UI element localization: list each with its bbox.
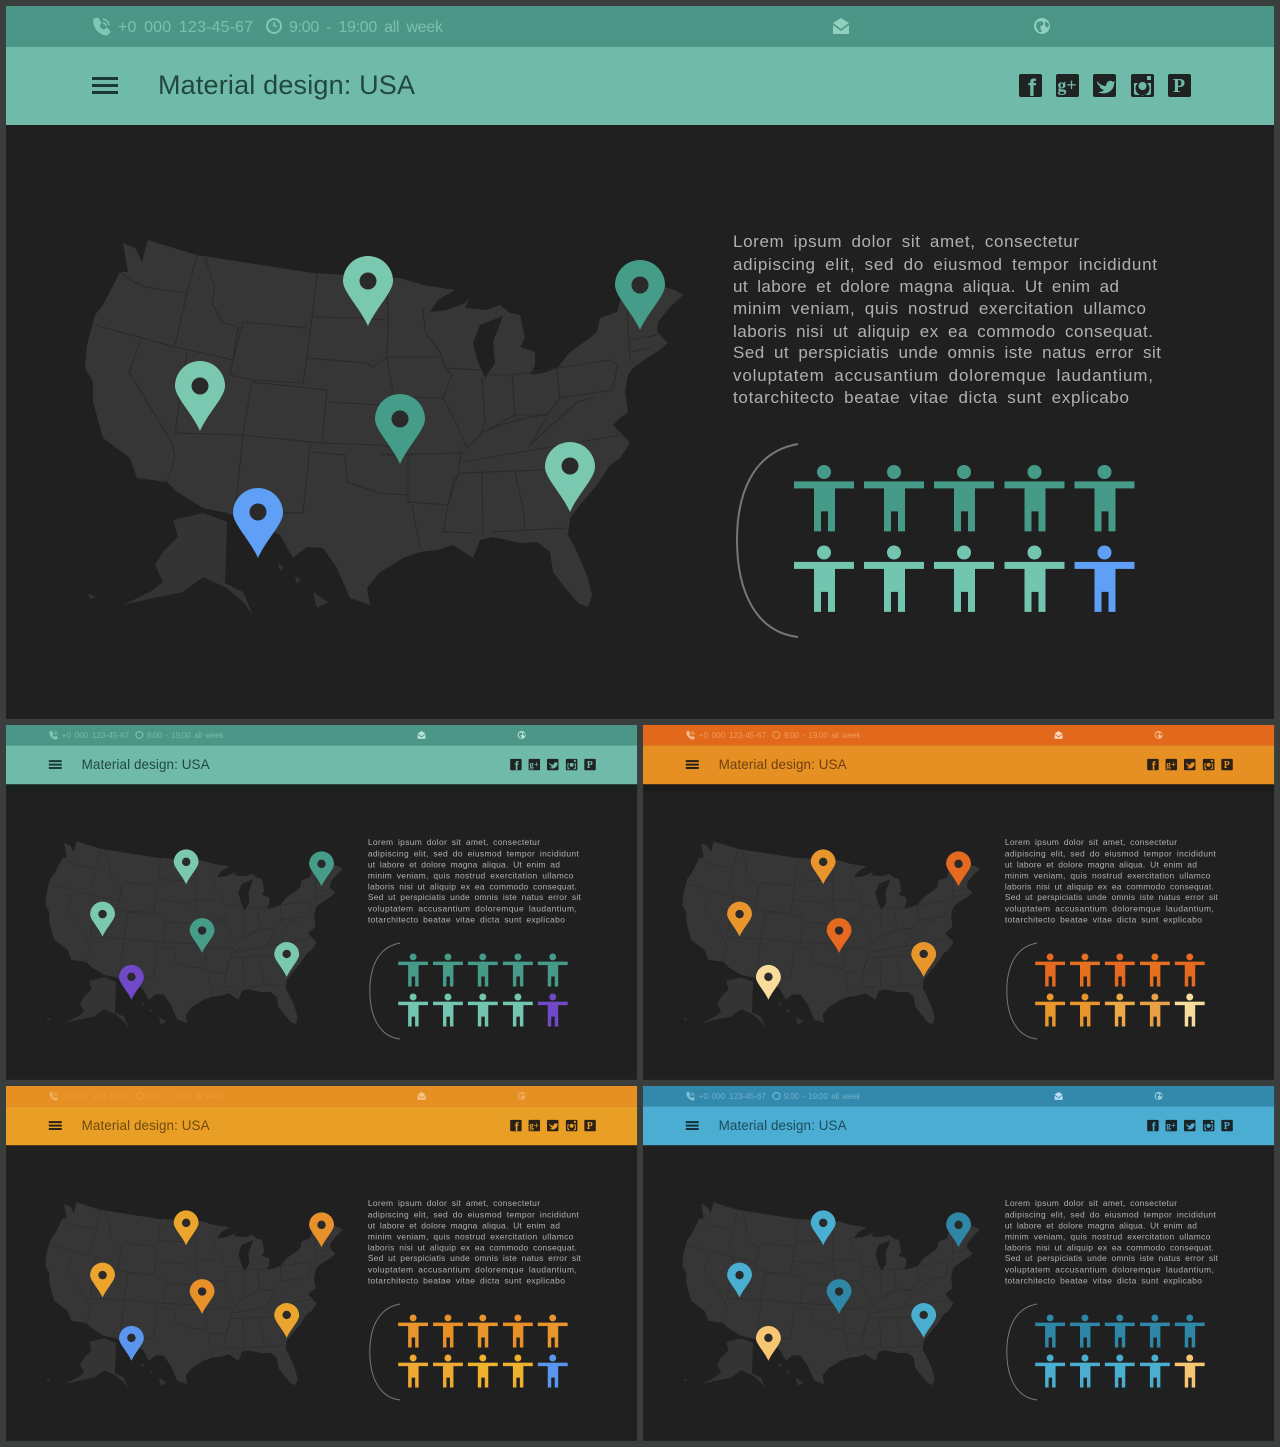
body text: minim veniam, quis nostrud exercitation ullamco: [368, 870, 574, 880]
body text: adipiscing elit, sed do eiusmod tempor incididunt: [1005, 1209, 1216, 1219]
bracket: [1007, 1304, 1037, 1400]
body text: [368, 837, 581, 925]
body text: ut labore et dolore magna aliqua. Ut enim ad: [1005, 1220, 1197, 1230]
header: title bar: [6, 745, 637, 784]
social icons: f: [1152, 1120, 1156, 1134]
body text: ut labore et dolore magna aliqua. Ut enim ad: [368, 1220, 560, 1230]
USA map with pins: [45, 841, 343, 1028]
body text: Lorem ipsum dolor sit amet, consectetur: [733, 232, 1079, 251]
body text: Sed ut perspiciatis unde omnis iste natus error sit: [368, 892, 581, 902]
header: top contact bar: [643, 1086, 1274, 1106]
header: title bar: Material design: USA: [719, 1118, 847, 1133]
body text: minim veniam, quis nostrud exercitation ullamco: [368, 1231, 574, 1241]
body text: [733, 232, 1161, 407]
header: title bar: Material design: USA: [82, 1118, 210, 1133]
social icons: g+: [1057, 75, 1077, 95]
body text: [368, 1198, 581, 1286]
body text: voluptatem accusantium doloremque laudantium,: [1005, 1265, 1214, 1275]
body text: [1005, 1198, 1218, 1286]
social icons: [510, 759, 596, 773]
people pictogram: [398, 953, 568, 1027]
header: top contact bar: +0 000 123-45-67: [699, 1092, 766, 1101]
body text: adipiscing elit, sed do eiusmod tempor incididunt: [1005, 848, 1216, 858]
header: top contact bar: [6, 725, 637, 745]
header: top contact bar: 9:00 - 19:00 all week: [784, 731, 861, 740]
social icons: f: [1028, 75, 1037, 102]
social icons: P: [1224, 1121, 1230, 1132]
social icons: f: [1152, 759, 1156, 773]
body text: adipiscing elit, sed do eiusmod tempor incididunt: [733, 255, 1157, 274]
body text: Sed ut perspiciatis unde omnis iste natus error sit: [1005, 1253, 1218, 1263]
social icons: [1147, 1120, 1233, 1134]
social icons: [1019, 74, 1191, 102]
header: title bar: [6, 1106, 637, 1145]
people pictogram: [398, 1314, 568, 1388]
body text: laboris nisi ut aliquip ex ea commodo consequat.: [1005, 1243, 1214, 1253]
USA map with pins: [682, 841, 980, 1028]
USA map with pins: [682, 1202, 980, 1389]
social icons: P: [1224, 760, 1230, 771]
panel: small orange slide: [643, 725, 1274, 1080]
social icons: g+: [529, 1120, 539, 1130]
body text: [1005, 837, 1218, 925]
social icons: P: [1173, 75, 1185, 97]
header: top contact bar: [643, 725, 1274, 745]
body text: voluptatem accusantium doloremque laudantium,: [1005, 904, 1214, 914]
header: title bar: Material design: USA: [82, 757, 210, 772]
header: top contact bar: +0 000 123-45-67: [62, 1092, 129, 1101]
body text: minim veniam, quis nostrud exercitation ullamco: [1005, 870, 1211, 880]
body text: minim veniam, quis nostrud exercitation ullamco: [1005, 1231, 1211, 1241]
body text: laboris nisi ut aliquip ex ea commodo consequat.: [368, 1243, 577, 1253]
body text: ut labore et dolore magna aliqua. Ut enim ad: [1005, 859, 1197, 869]
body text: adipiscing elit, sed do eiusmod tempor incididunt: [368, 848, 579, 858]
body text: Lorem ipsum dolor sit amet, consectetur: [368, 1198, 540, 1208]
header: title bar: [643, 745, 1274, 784]
body text: voluptatem accusantium doloremque laudantium,: [368, 904, 577, 914]
body text: ut labore et dolore magna aliqua. Ut enim ad: [733, 277, 1119, 296]
header: top contact bar: 9:00 - 19:00 all week: [289, 19, 444, 36]
bracket: [370, 943, 400, 1039]
body text: totarchitecto beatae vitae dicta sunt explicabo: [1005, 1276, 1202, 1286]
header: top contact bar: +0 000 123-45-67: [118, 19, 253, 36]
body text: Lorem ipsum dolor sit amet, consectetur: [1005, 1198, 1177, 1208]
social icons: g+: [529, 759, 539, 769]
header: title bar: Material design: USA: [158, 70, 415, 100]
people pictogram: [1035, 1314, 1205, 1388]
header: title bar: [6, 47, 1274, 125]
header: top contact bar: +0 000 123-45-67: [62, 731, 129, 740]
USA map with pins: [45, 1202, 343, 1389]
header: top contact bar: 9:00 - 19:00 all week: [784, 1092, 861, 1101]
body text: totarchitecto beatae vitae dicta sunt explicabo: [733, 388, 1129, 407]
social icons: P: [587, 1121, 593, 1132]
header: top contact bar: 9:00 - 19:00 all week: [147, 731, 224, 740]
header: top contact bar: [6, 1086, 637, 1106]
panel: small teal slide: [6, 725, 637, 1080]
body text: Lorem ipsum dolor sit amet, consectetur: [1005, 837, 1177, 847]
body text: voluptatem accusantium doloremque laudantium,: [368, 1265, 577, 1275]
people pictogram: [794, 465, 1134, 612]
body text: Sed ut perspiciatis unde omnis iste natus error sit: [733, 343, 1161, 362]
people pictogram: [1035, 953, 1205, 1027]
header: top contact bar: +0 000 123-45-67: [699, 731, 766, 740]
bracket: [370, 1304, 400, 1400]
header: title bar: Material design: USA: [719, 757, 847, 772]
header: top contact bar: [6, 6, 1274, 47]
social icons: g+: [1166, 759, 1176, 769]
social icons: f: [515, 759, 519, 773]
body text: Lorem ipsum dolor sit amet, consectetur: [368, 837, 540, 847]
body text: laboris nisi ut aliquip ex ea commodo consequat.: [1005, 882, 1214, 892]
social icons: f: [515, 1120, 519, 1134]
bracket: [737, 444, 798, 637]
body text: totarchitecto beatae vitae dicta sunt explicabo: [368, 1276, 565, 1286]
panel: main teal slide: [6, 6, 1274, 719]
panel: small blue slide: [643, 1086, 1274, 1441]
body text: Sed ut perspiciatis unde omnis iste natus error sit: [368, 1253, 581, 1263]
header: top contact bar: 9:00 - 19:00 all week: [147, 1092, 224, 1101]
panel: small amber slide: [6, 1086, 637, 1441]
body text: minim veniam, quis nostrud exercitation ullamco: [733, 299, 1146, 318]
body text: adipiscing elit, sed do eiusmod tempor incididunt: [368, 1209, 579, 1219]
body text: laboris nisi ut aliquip ex ea commodo consequat.: [733, 322, 1153, 341]
bracket: [1007, 943, 1037, 1039]
body text: Sed ut perspiciatis unde omnis iste natus error sit: [1005, 892, 1218, 902]
body text: voluptatem accusantium doloremque laudantium,: [733, 366, 1153, 385]
body text: laboris nisi ut aliquip ex ea commodo consequat.: [368, 882, 577, 892]
body text: ut labore et dolore magna aliqua. Ut enim ad: [368, 859, 560, 869]
body text: totarchitecto beatae vitae dicta sunt explicabo: [368, 915, 565, 925]
header: title bar: [643, 1106, 1274, 1145]
social icons: P: [587, 760, 593, 771]
social icons: [510, 1120, 596, 1134]
social icons: g+: [1166, 1120, 1176, 1130]
USA map with pins: [85, 240, 683, 615]
body text: totarchitecto beatae vitae dicta sunt explicabo: [1005, 915, 1202, 925]
social icons: [1147, 759, 1233, 773]
